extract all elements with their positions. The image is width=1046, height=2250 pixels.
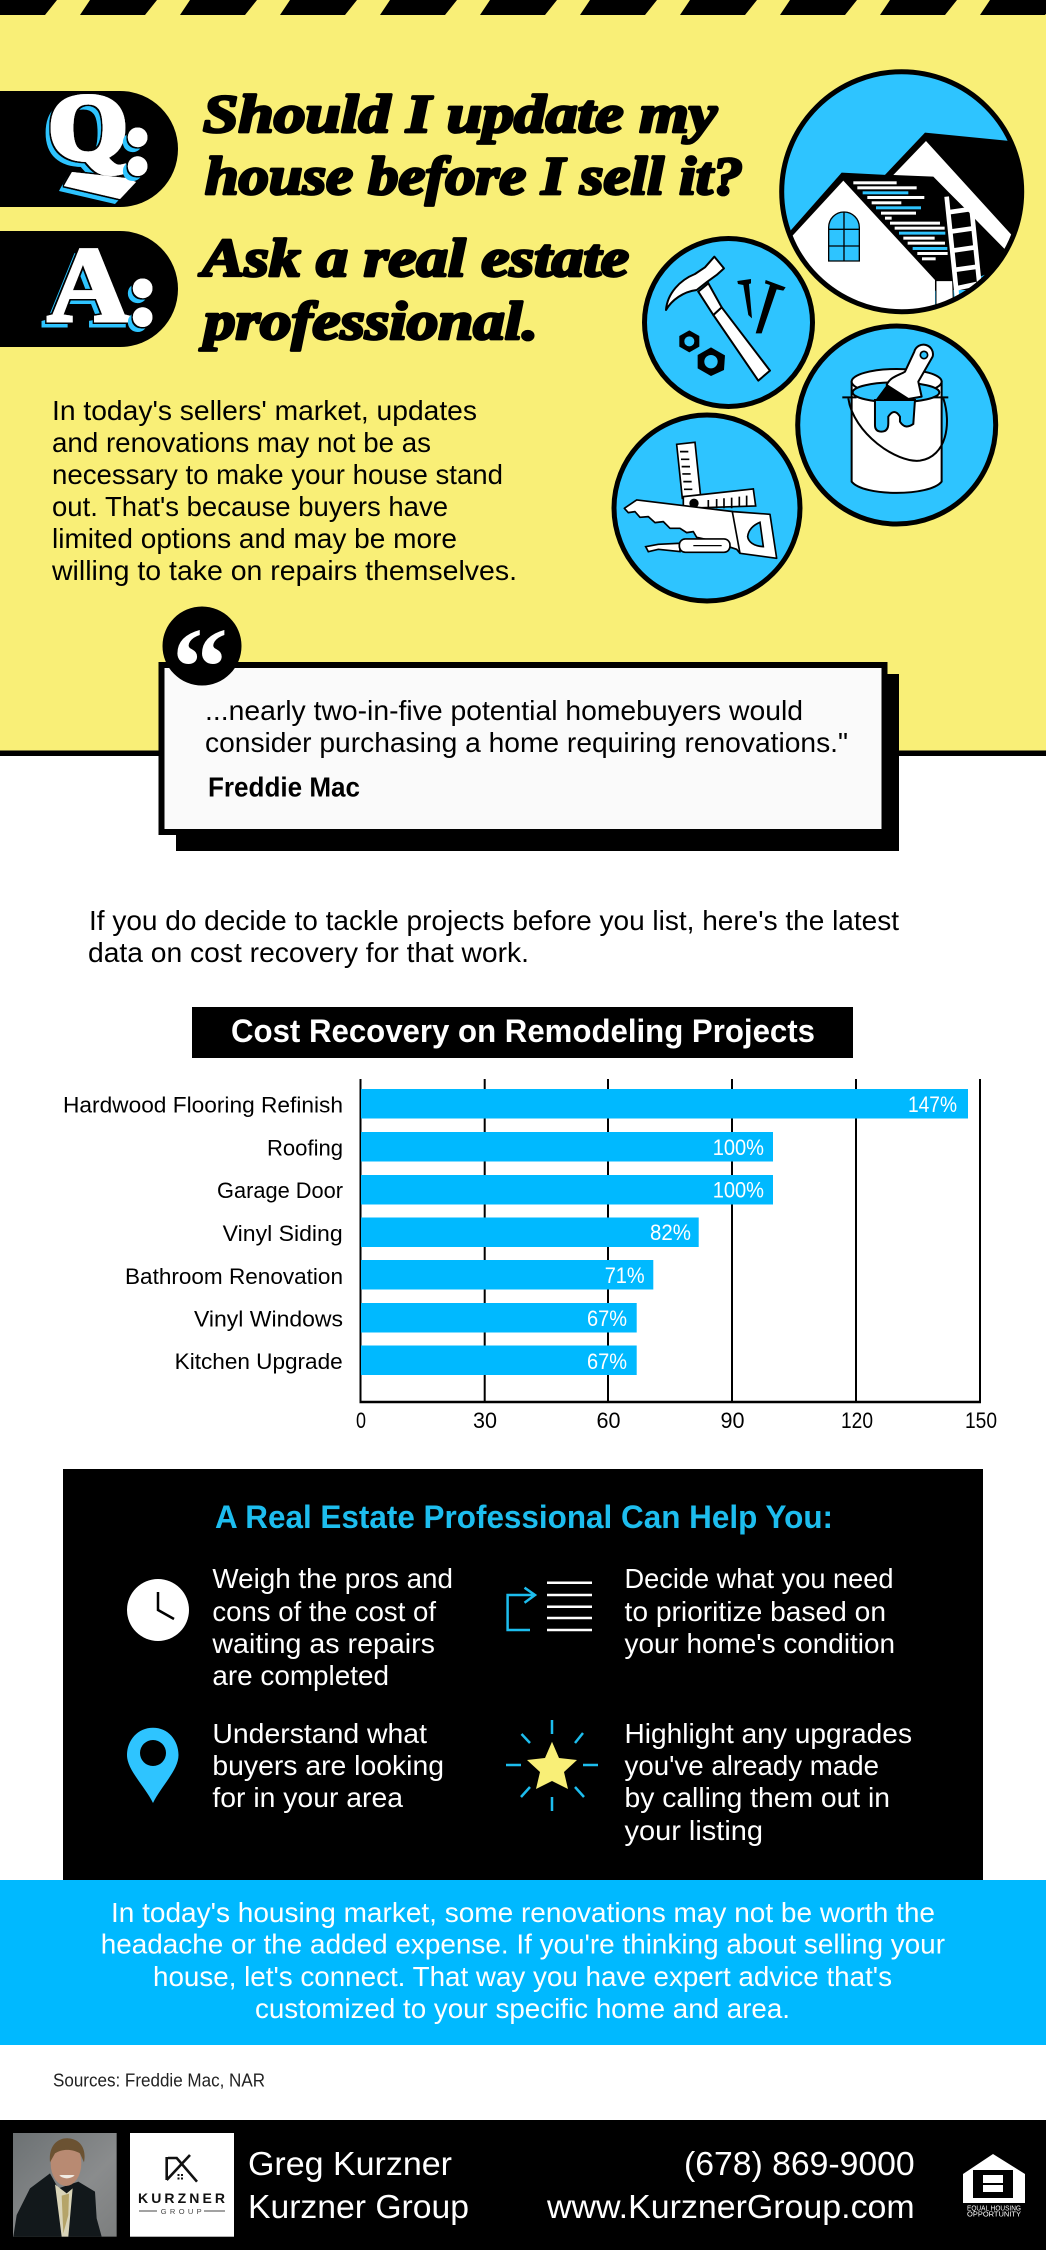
- panel: how a professional can help: [63, 1469, 983, 1880]
- quote text: consider purchasing a home requiring renovations.": [205, 727, 848, 758]
- icon: hammer and nails: [644, 238, 812, 406]
- text: decide priorities: your home's condition: [624, 1628, 895, 1659]
- quote text: [205, 695, 848, 758]
- question heading: [203, 84, 743, 206]
- intro paragraph: limited options and may be more: [52, 523, 457, 554]
- panel heading: A Real Estate Professional Can Help You:: [215, 1499, 833, 1535]
- text: weigh pros and cons: Weigh the pros and: [212, 1563, 453, 1594]
- bar: Vinyl Siding: Vinyl Siding: [223, 1221, 343, 1246]
- chart title: [192, 1007, 853, 1058]
- axis tick labels: 0: [356, 1408, 366, 1433]
- Q badge: :: [123, 93, 153, 192]
- bar: Vinyl Windows: 67%: [587, 1306, 627, 1331]
- icon: star: [506, 1720, 598, 1811]
- text: highlight upgrades: [624, 1718, 912, 1846]
- bar: Roofing: 100%: [713, 1135, 764, 1160]
- footer: [0, 2120, 1046, 2250]
- logo mark: [167, 2155, 197, 2182]
- intro paragraph: necessary to make your house stand: [52, 459, 503, 490]
- text: understand buyers: buyers are looking: [212, 1750, 444, 1781]
- yellow header panel: [0, 0, 1046, 756]
- sources: Sources: Freddie Mac, NAR: [53, 2071, 265, 2091]
- call to action band: [0, 1880, 1046, 2045]
- bar: Vinyl Windows: [194, 1303, 637, 1332]
- text: weigh pros and cons: are completed: [212, 1660, 389, 1691]
- bar: Bathroom Renovation: Bathroom Renovation: [125, 1264, 343, 1289]
- text: weigh pros and cons: cons of the cost of: [212, 1596, 436, 1627]
- answer heading: [198, 228, 629, 351]
- axis tick labels: 120: [841, 1408, 873, 1433]
- agent name: [248, 2145, 469, 2225]
- icon: equal housing opportunity: OPPORTUNITY: [967, 2212, 1021, 2218]
- text: weigh pros and cons: waiting as repairs: [211, 1628, 435, 1659]
- icon: paint bucket: [798, 326, 996, 524]
- chart intro text: [88, 905, 899, 968]
- icon: ruler saw and screwdriver: [614, 415, 800, 601]
- chart intro text: If you do decide to tackle projects before you list, here's the latest: [89, 905, 899, 936]
- agent name: Kurzner Group: [248, 2188, 469, 2225]
- text: highlight upgrades: Highlight any upgrades: [624, 1718, 912, 1749]
- bar: Garage Door: 100%: [713, 1178, 764, 1203]
- agent photo: [13, 2133, 117, 2237]
- axis tick labels: 90: [720, 1408, 744, 1433]
- call to action band: headache or the added expense. If you're thinking about selling your: [101, 1928, 945, 1960]
- agent name: Greg Kurzner: [248, 2145, 452, 2182]
- intro paragraph: willing to take on repairs themselves.: [51, 555, 517, 586]
- Q badge: Q: [49, 76, 127, 178]
- answer heading: professional.: [199, 291, 538, 351]
- bar: Kitchen Upgrade: Kitchen Upgrade: [175, 1349, 343, 1374]
- text: highlight upgrades: your listing: [624, 1815, 763, 1846]
- axis tick labels: 150: [965, 1408, 997, 1433]
- quote attribution: Freddie Mac: [208, 772, 360, 802]
- text: highlight upgrades: you've already made: [624, 1750, 879, 1781]
- A badge: [0, 226, 178, 347]
- text: understand buyers: for in your area: [212, 1782, 403, 1813]
- contact details: (678) 869-9000: [684, 2145, 915, 2182]
- Q badge: [0, 76, 178, 207]
- text: highlight upgrades: by calling them out in: [624, 1782, 890, 1813]
- logo wordmark: KURZNER: [138, 2190, 225, 2206]
- bar: Kitchen Upgrade: [175, 1346, 637, 1375]
- bar: Garage Door: [217, 1175, 773, 1204]
- call to action band: In today's housing market, some renovations may not be worth the: [111, 1897, 935, 1928]
- icon: priority list: [508, 1583, 592, 1630]
- bar: Bathroom Renovation: 71%: [605, 1263, 645, 1288]
- contact details: www.KurznerGroup.com: [546, 2188, 915, 2225]
- company logo: [130, 2133, 234, 2237]
- icon: equal housing opportunity: EQUAL HOUSING: [967, 2206, 1021, 2212]
- axis tick labels: 30: [473, 1408, 497, 1433]
- text: decide priorities: [624, 1563, 895, 1659]
- axis tick labels: [356, 1408, 997, 1433]
- bar: Kitchen Upgrade: 67%: [587, 1349, 627, 1374]
- icon: clock: [127, 1579, 189, 1641]
- A badge: :: [128, 244, 158, 343]
- intro paragraph: and renovations may not be as: [52, 427, 431, 458]
- intro paragraph: In today's sellers' market, updates: [52, 395, 477, 426]
- bar: Vinyl Siding: 82%: [650, 1220, 691, 1245]
- chart title: Cost Recovery on Remodeling Projects: [231, 1013, 815, 1049]
- intro paragraph: [51, 395, 517, 586]
- bar: Bathroom Renovation: [125, 1260, 653, 1290]
- text: decide priorities: Decide what you need: [624, 1563, 894, 1594]
- text: understand buyers: [212, 1718, 444, 1813]
- question heading: Should I update my: [203, 84, 718, 144]
- text: understand buyers: Understand what: [212, 1718, 427, 1749]
- bar: Hardwood Flooring Refinish: 147%: [908, 1092, 957, 1117]
- logo sub-wordmark: GROUP: [161, 2207, 202, 2216]
- bar: Hardwood Flooring Refinish: [63, 1089, 968, 1118]
- call to action band: house, let's connect. That way you have expert advice that's: [153, 1961, 892, 1992]
- icon: quotation mark: “: [172, 606, 228, 730]
- call to action band: customized to your specific home and area.: [255, 1993, 790, 2024]
- text: decide priorities: to prioritize based on: [624, 1596, 886, 1627]
- A badge: A: [47, 226, 130, 345]
- bar: Vinyl Siding: [223, 1218, 699, 1247]
- axis tick labels: 60: [596, 1408, 620, 1433]
- chart intro text: data on cost recovery for that work.: [88, 937, 529, 968]
- question heading: house before I sell it?: [205, 146, 743, 206]
- bar: Hardwood Flooring Refinish: Hardwood Flooring Refinish: [63, 1092, 343, 1118]
- answer heading: Ask a real estate: [198, 228, 629, 288]
- bar chart: [63, 1079, 997, 1433]
- intro paragraph: out. That's because buyers have: [52, 491, 448, 522]
- hazard stripe band: [0, 0, 1046, 15]
- contact details: [546, 2145, 915, 2225]
- quote card: [162, 665, 899, 851]
- bar: Vinyl Windows: Vinyl Windows: [194, 1306, 343, 1332]
- icon: house roof repair: [782, 72, 1033, 323]
- icon: equal housing opportunity: [963, 2154, 1025, 2218]
- bar: Garage Door: Garage Door: [217, 1178, 343, 1203]
- quote text: ...nearly two-in-five potential homebuyers would: [205, 695, 803, 726]
- icon: location pin: [127, 1728, 178, 1803]
- bar: Roofing: Roofing: [267, 1136, 343, 1160]
- bar: Roofing: [267, 1132, 773, 1162]
- text: weigh pros and cons: [211, 1563, 453, 1691]
